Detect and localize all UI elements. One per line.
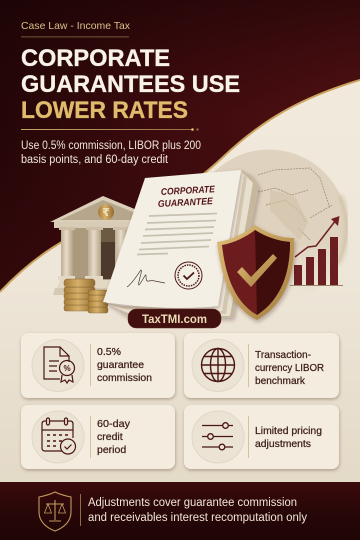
footer text bbox=[88, 497, 307, 524]
card text: guarantee bbox=[97, 359, 144, 371]
illustration: guarantee document stack bbox=[103, 170, 259, 318]
footer band bbox=[0, 482, 360, 540]
illustration: bar chart with arrow bbox=[290, 216, 343, 286]
title: GUARANTEES USE bbox=[21, 71, 240, 98]
illustration: globe bbox=[190, 150, 348, 306]
website pill bbox=[128, 309, 221, 328]
website pill: TaxTMI.com bbox=[142, 312, 207, 326]
title: CORPORATE bbox=[21, 45, 170, 72]
icon: percent document bbox=[44, 347, 74, 383]
card text: adjustments bbox=[255, 438, 311, 450]
document heading bbox=[158, 184, 216, 210]
card text bbox=[97, 418, 131, 456]
card text: 0.5% bbox=[97, 346, 121, 358]
card text bbox=[255, 425, 322, 450]
icon: shield with scales bbox=[39, 492, 71, 531]
card text: commission bbox=[97, 372, 152, 384]
card text: benchmark bbox=[255, 375, 306, 387]
main page bbox=[103, 170, 241, 308]
card text: Transaction- bbox=[255, 349, 311, 361]
illustration: shield with check bbox=[217, 225, 294, 320]
panel: guarantee commission bbox=[21, 333, 175, 398]
signature bbox=[127, 270, 165, 287]
illustration: bank building bbox=[50, 196, 142, 295]
document heading: CORPORATE bbox=[161, 184, 216, 198]
icon: rupee coin: ₹ bbox=[102, 206, 110, 219]
icon: seal with check bbox=[175, 262, 202, 289]
panel: LIBOR benchmark bbox=[184, 333, 339, 398]
kicker: case law: Case Law - Income Tax bbox=[21, 20, 131, 32]
document heading: GUARANTEE bbox=[158, 196, 214, 210]
card text bbox=[97, 346, 152, 384]
document text lines bbox=[137, 214, 217, 254]
card text: credit bbox=[97, 431, 123, 443]
footer text: Adjustments cover guarantee commission bbox=[88, 497, 297, 509]
footer text: and receivables interest recomputation only bbox=[88, 512, 307, 524]
card text: period bbox=[97, 444, 126, 456]
subtitle: Use 0.5% commission, LIBOR plus 200 bbox=[21, 140, 201, 152]
icon: calendar with check bbox=[42, 418, 76, 454]
panel: pricing adjustments bbox=[184, 405, 339, 469]
icon: sliders bbox=[202, 423, 233, 450]
card text: Limited pricing bbox=[255, 425, 322, 437]
card text: 60-day bbox=[97, 418, 131, 430]
kicker: case law bbox=[21, 20, 131, 37]
subtitle: basis points, and 60-day credit bbox=[21, 154, 169, 166]
panel: credit period bbox=[21, 405, 175, 469]
maroon hero background with gold curve bbox=[0, 0, 360, 292]
title rule bbox=[21, 128, 199, 131]
icon: percent document: % bbox=[63, 364, 71, 373]
title bbox=[21, 45, 240, 124]
card text: currency LIBOR bbox=[255, 362, 324, 374]
title: LOWER RATES bbox=[21, 97, 188, 124]
icon: globe bbox=[202, 348, 234, 382]
subtitle bbox=[21, 140, 201, 166]
illustration: coin stacks bbox=[64, 279, 108, 313]
card text bbox=[255, 349, 324, 387]
